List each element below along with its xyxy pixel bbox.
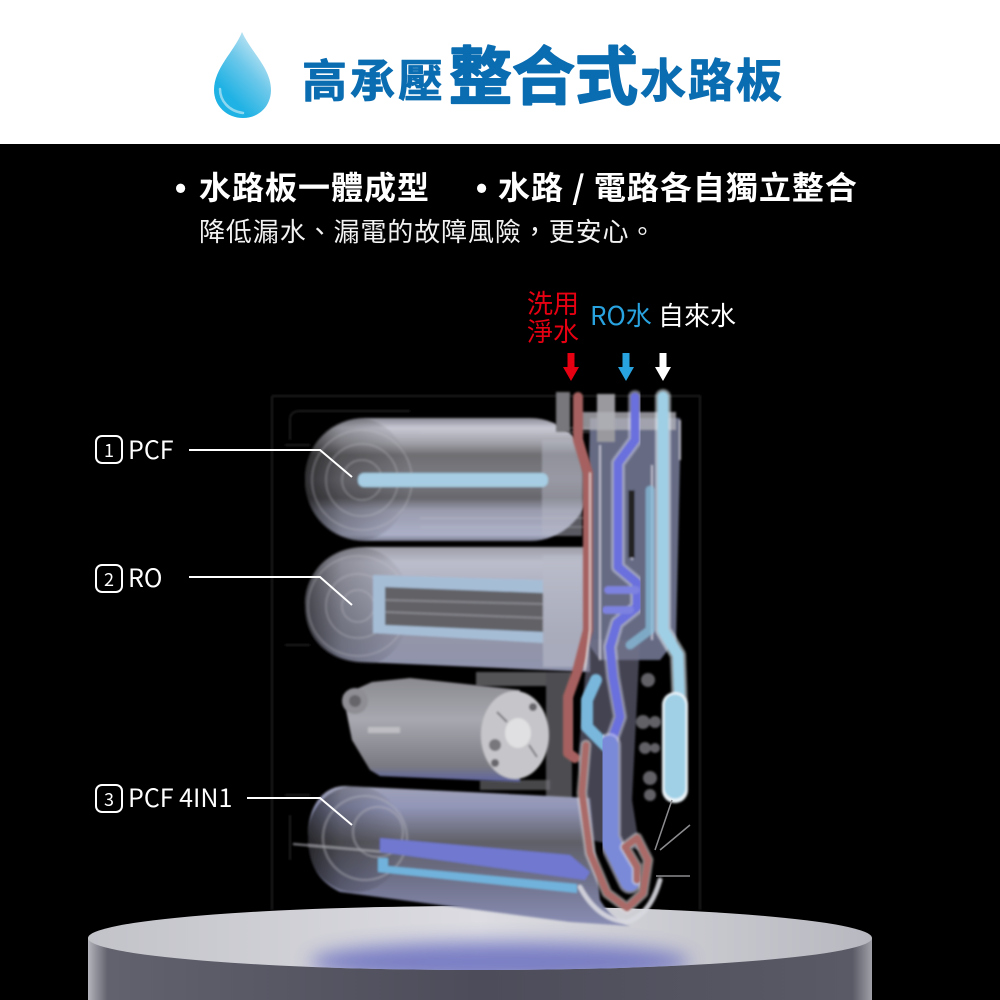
feature description: 降低漏水、漏電的故障風險，更安心。 xyxy=(199,212,656,249)
callout: RO: 2 xyxy=(104,566,114,592)
title: 整合式 xyxy=(449,27,638,118)
label: tap water: 自來水 xyxy=(658,296,736,333)
header band xyxy=(0,0,1000,144)
label: wash water: 淨水 xyxy=(527,312,579,349)
callout: PCF: 1 xyxy=(104,437,114,463)
feature headline right: 水路 / 電路各自獨立整合 xyxy=(498,163,858,209)
title: 水路板 xyxy=(640,45,784,111)
tank 1 xyxy=(305,418,590,541)
feature headline left: • xyxy=(175,170,187,206)
callout: RO xyxy=(96,559,352,605)
arrow: white xyxy=(655,353,671,381)
title xyxy=(302,27,784,118)
housing outline xyxy=(272,396,700,910)
callout: PCF 4IN1: 3 xyxy=(104,786,114,812)
tank 2 xyxy=(305,547,590,672)
label: wash water: 洗用 xyxy=(527,284,579,321)
platform xyxy=(88,906,872,1000)
callout: PCF: PCF xyxy=(128,431,174,467)
callout: PCF xyxy=(96,431,352,477)
label: RO water: RO水 xyxy=(590,296,652,333)
label: wash water xyxy=(527,284,579,349)
callout: PCF 4IN1 xyxy=(96,779,352,825)
pipe: wash water xyxy=(568,397,660,922)
feature headline right: • xyxy=(476,170,488,206)
icon: water drop xyxy=(214,32,271,118)
feature headline left: 水路板一體成型 xyxy=(199,163,430,209)
tank 3 xyxy=(293,786,630,926)
arrow: red xyxy=(563,353,579,381)
platform reflection xyxy=(310,942,690,982)
pump motor xyxy=(342,678,549,782)
platform top xyxy=(88,906,872,970)
bead details xyxy=(636,673,661,801)
callout: PCF 4IN1: PCF 4IN1 xyxy=(128,779,232,815)
flow channel block xyxy=(556,392,680,850)
platform side xyxy=(88,938,872,1000)
arrow: blue xyxy=(618,353,634,381)
internal frame column xyxy=(476,672,572,800)
title: 高承壓 xyxy=(302,45,446,110)
pipe: tap water xyxy=(587,397,680,790)
callout: RO: RO xyxy=(128,559,162,595)
filter bracket strokes xyxy=(655,800,690,876)
pipe: RO water xyxy=(606,397,637,882)
water purifier cutaway illustration xyxy=(88,392,872,1000)
